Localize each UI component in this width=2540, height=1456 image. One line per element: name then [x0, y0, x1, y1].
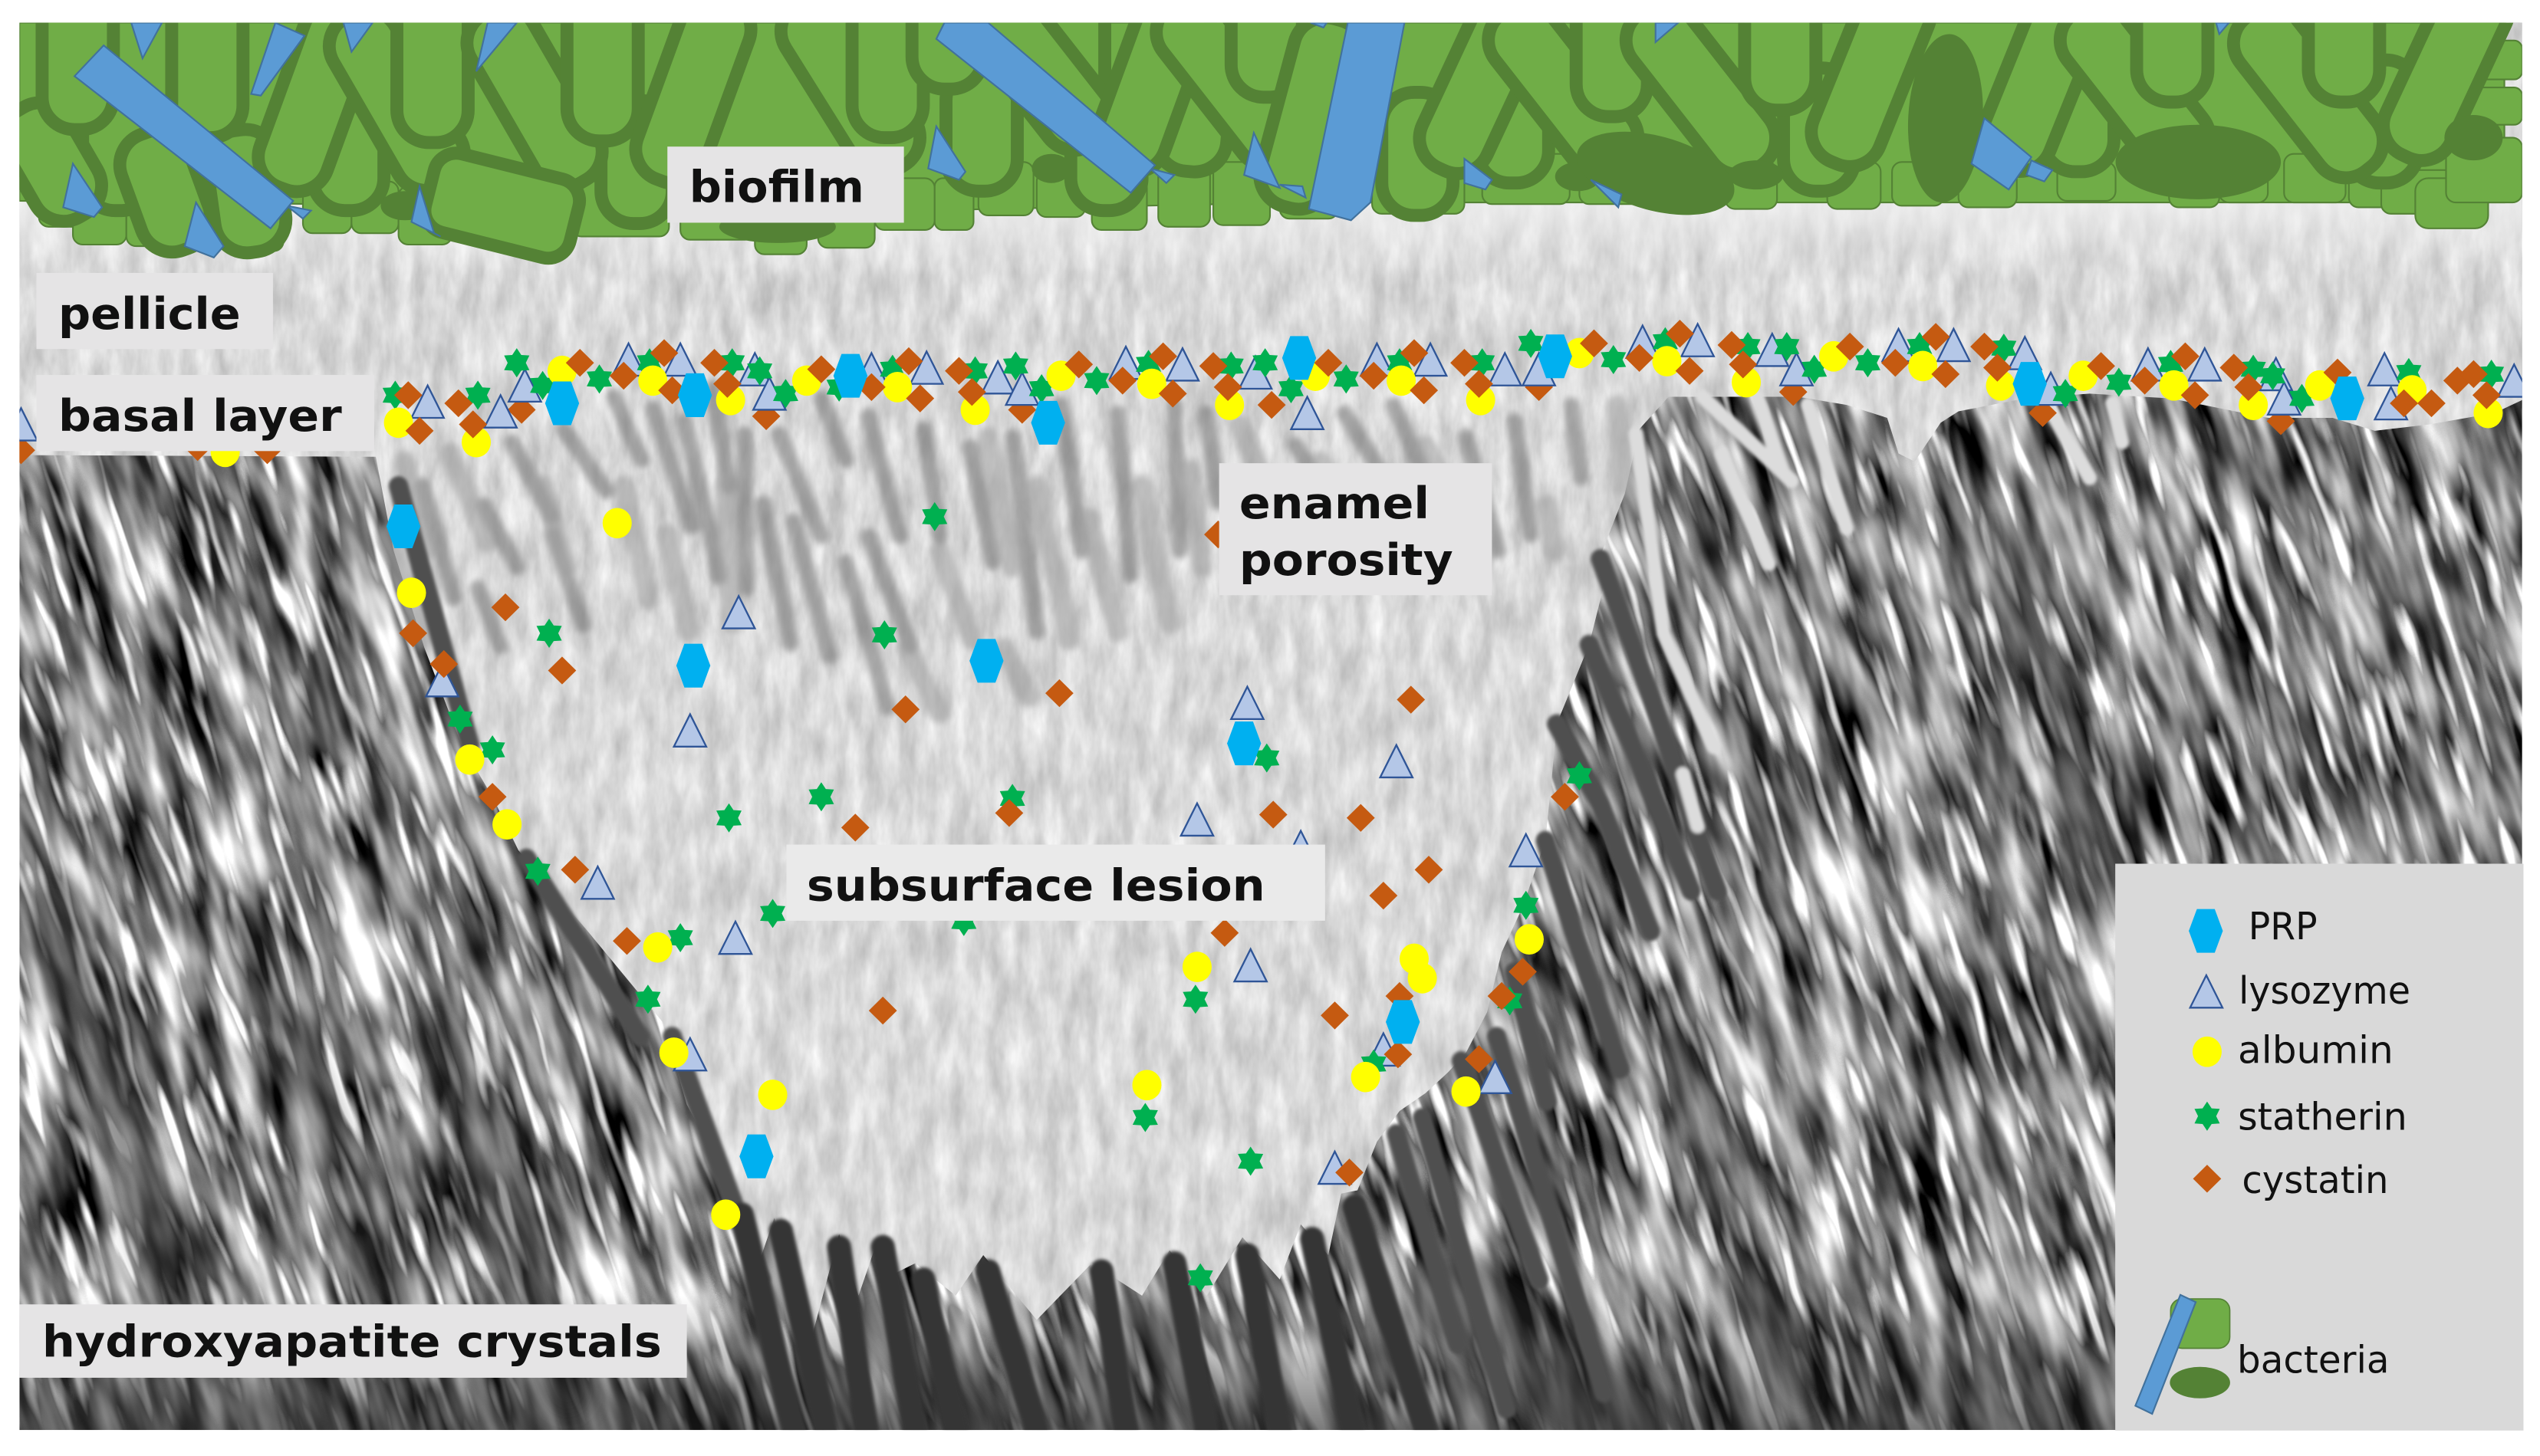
label: enamel porosity — [1219, 463, 1492, 595]
lysozyme triangles — [5, 324, 2530, 1184]
label: pellicle — [37, 273, 273, 349]
cystatin behind lysozyme — [7, 373, 2295, 548]
label: biofilm: biofilm — [689, 162, 864, 212]
legend panel — [2115, 864, 2523, 1431]
label: enamel porosity: porosity — [1239, 535, 1453, 586]
legend: cystatin: cystatin — [2242, 1159, 2389, 1202]
porous enamel rods in upper lesion — [389, 389, 1623, 712]
PRP hexagons — [387, 334, 2364, 1178]
legend: bacteria: bacteria — [2237, 1339, 2390, 1382]
dark crystal fingers at lesion margin — [399, 397, 2122, 1430]
back row of small bacteria — [39, 41, 2522, 255]
label: enamel porosity: enamel — [1239, 478, 1430, 529]
legend: albumin: albumin — [2238, 1030, 2394, 1073]
wide coccoid bacterium — [420, 149, 584, 263]
cystatin diamonds — [394, 320, 2501, 1186]
large rod bacteria, upper row — [42, 0, 2519, 216]
legend: PRP — [2189, 905, 2318, 953]
biofilm bacteria layer — [0, 0, 2522, 263]
label: basal layer — [37, 375, 374, 451]
dark shaded crystal bands — [48, 534, 2122, 1425]
legend: statherin: statherin — [2238, 1096, 2407, 1139]
dark green bacteria — [380, 32, 2502, 243]
label: biofilm — [667, 146, 904, 222]
biofilm base mat — [19, 23, 2505, 211]
legend: lysozyme: lysozyme — [2239, 970, 2410, 1013]
large rod bacteria, lower row — [0, 46, 2419, 261]
label: subsurface lesion: subsurface lesion — [807, 860, 1265, 911]
albumin circles — [211, 338, 2502, 1230]
label: hydroxyapatite crystals: hydroxyapatite crystals — [42, 1316, 662, 1367]
dark shading at base of enamel — [19, 1304, 2115, 1431]
legend: bacteria — [2135, 1295, 2390, 1414]
label: hydroxyapatite crystals — [19, 1304, 687, 1378]
statherin stars — [383, 327, 2504, 1293]
label: basal layer: basal layer — [58, 391, 342, 442]
legend: PRP: PRP — [2249, 905, 2318, 948]
blue rod bacteria — [63, 23, 2229, 258]
label: pellicle: pellicle — [58, 289, 241, 340]
protein markers in basal layer and lesion — [5, 320, 2530, 1293]
label: subsurface lesion — [786, 845, 1325, 921]
